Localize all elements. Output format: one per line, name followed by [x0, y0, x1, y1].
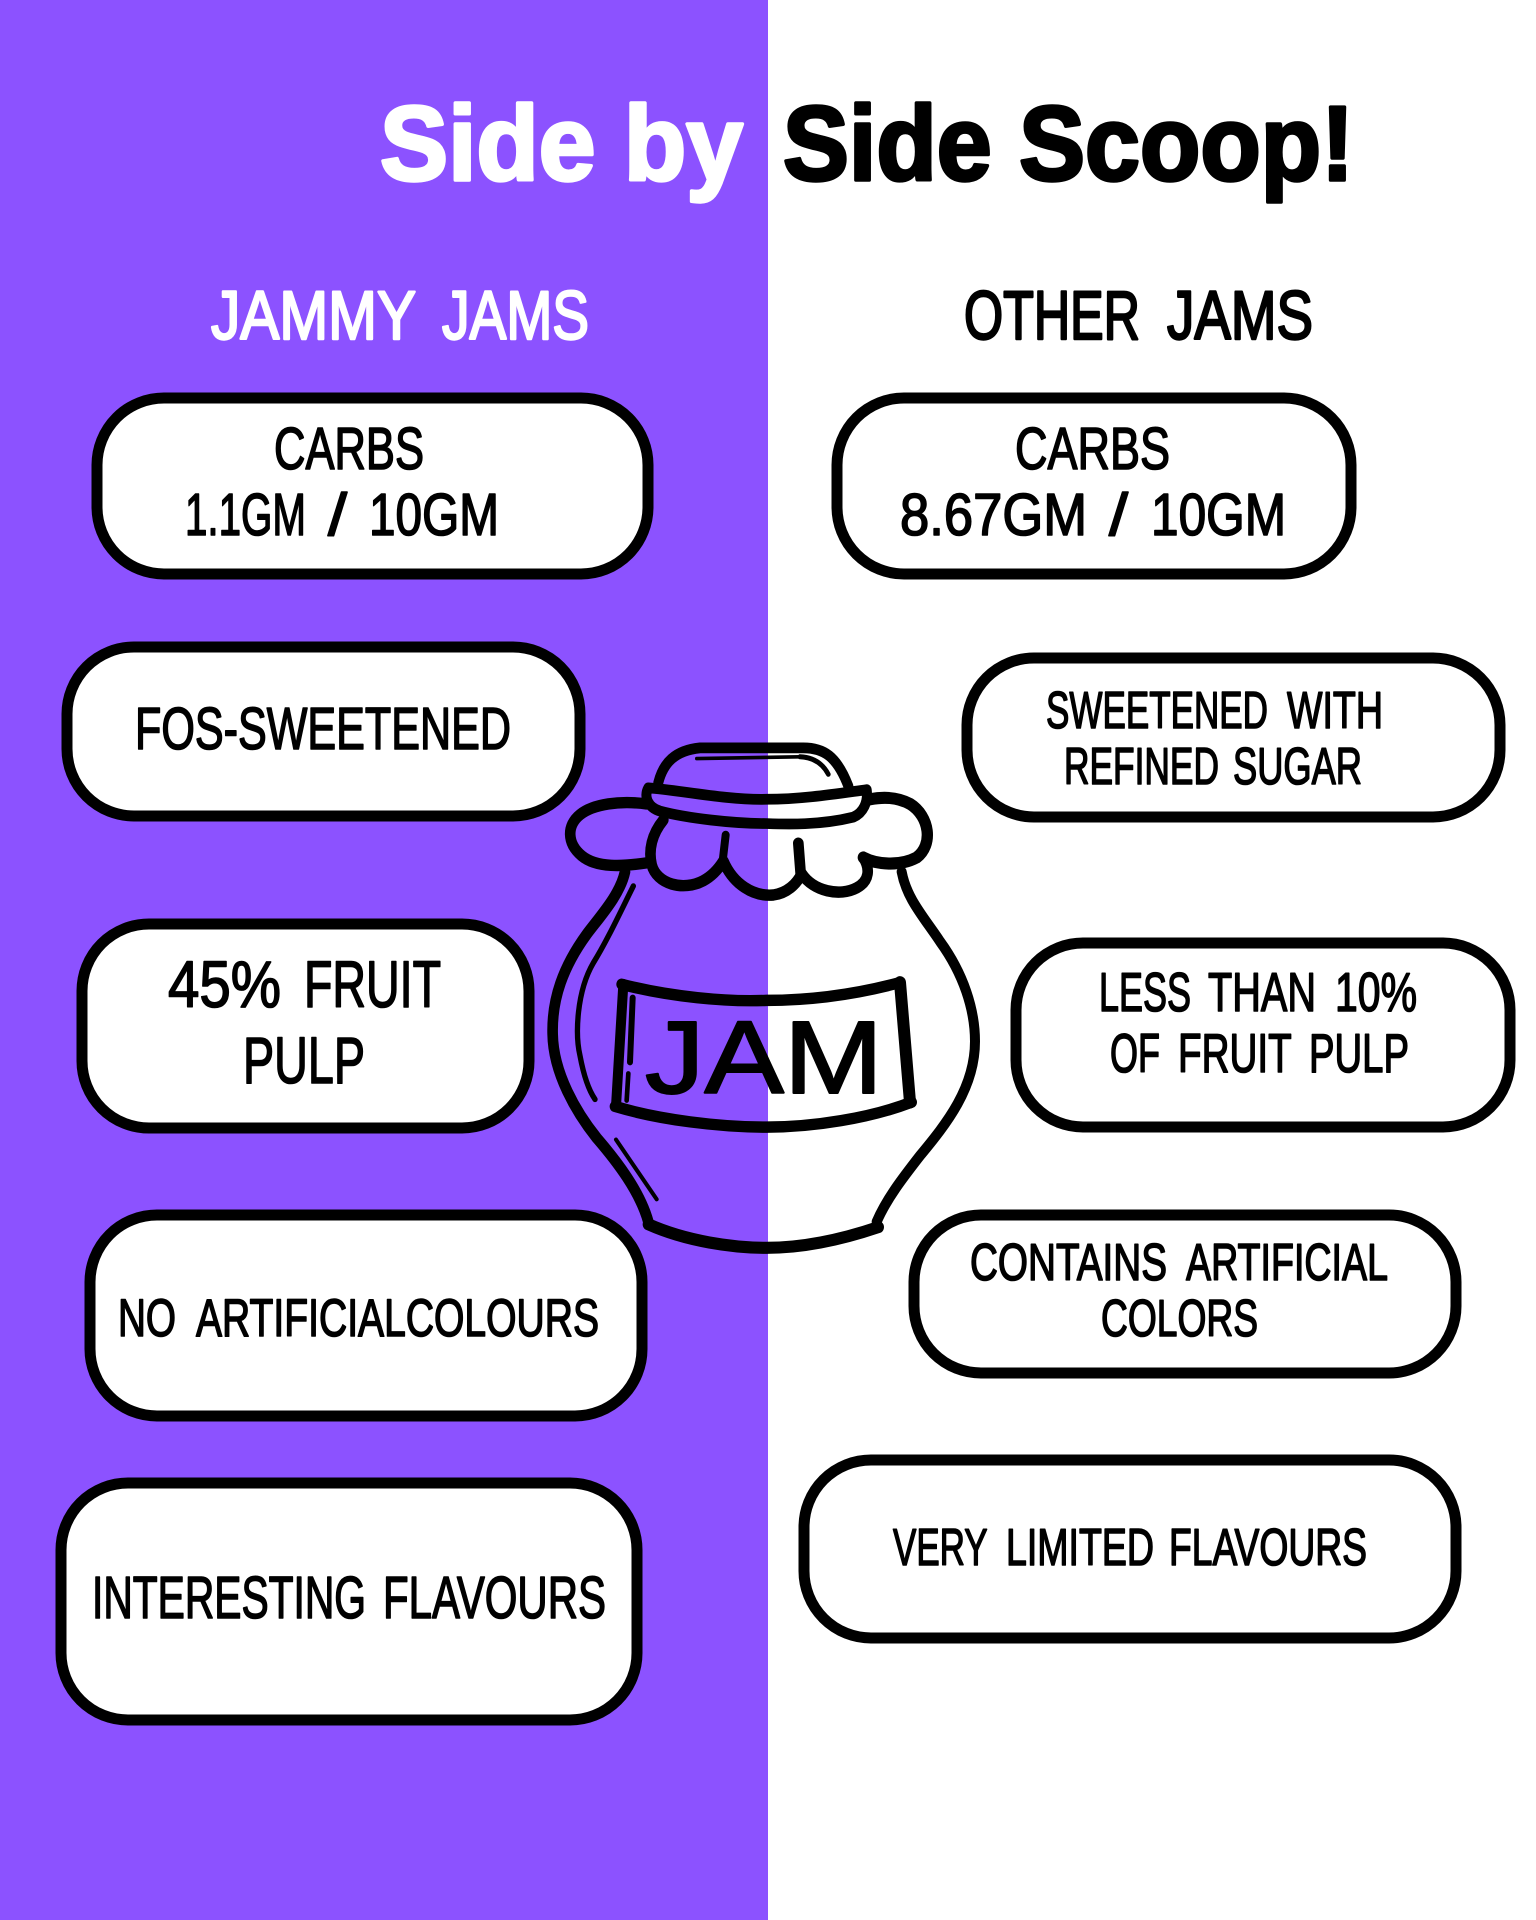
panel: interesting flavours: FLAVOURS	[383, 1565, 606, 1631]
panel: purple left half background	[0, 0, 768, 1920]
panel: very limited flavours: FLAVOURS	[1169, 1519, 1367, 1577]
title: black part: Side Scoop!	[783, 85, 1354, 203]
panel: interesting flavours	[61, 1483, 637, 1720]
panel: less than 10% fruit pulp: 10%	[1335, 961, 1417, 1023]
panel: 45% fruit pulp	[82, 924, 529, 1128]
panel: sweetened with refined sugar: SWEETENED	[1046, 682, 1268, 740]
panel: less than 10% fruit pulp: PULP	[1309, 1022, 1409, 1084]
panel: no artificial colours	[90, 1215, 642, 1416]
panel: sweetened with refined sugar: SUGAR	[1233, 738, 1362, 796]
panel: 45% fruit pulp: 45%	[168, 947, 281, 1021]
panel: Jammy Jams carbs: 1.1GM	[185, 482, 306, 548]
panel: 45% fruit pulp: PULP	[243, 1023, 365, 1097]
panel: no artificial colours: NO	[118, 1289, 176, 1348]
panel: less than 10% fruit pulp	[1016, 943, 1510, 1127]
panel: contains artificial colors	[914, 1215, 1456, 1373]
panel: Jammy Jams carbs: /	[328, 482, 348, 548]
panel: contains artificial colors: COLORS	[1101, 1290, 1258, 1348]
panel: Jammy Jams carbs	[97, 398, 648, 574]
panel: very limited flavours	[804, 1460, 1456, 1638]
panel: Jammy Jams carbs: CARBS	[274, 416, 424, 482]
panel: Other Jams carbs: /	[1109, 482, 1129, 548]
panel: very limited flavours: LIMITED	[1006, 1519, 1154, 1577]
panel: less than 10% fruit pulp: FRUIT	[1178, 1022, 1291, 1084]
panel: interesting flavours: INTERESTING	[92, 1565, 366, 1631]
panel: Other Jams carbs: 8.67GM	[900, 482, 1087, 548]
panel: contains artificial colors: CONTAINS	[970, 1234, 1167, 1292]
panel: sweetened with refined sugar: WITH	[1287, 682, 1383, 740]
heading: Jammy Jams: JAMMY	[211, 277, 415, 354]
panel: very limited flavours: VERY	[893, 1519, 987, 1577]
panel: no artificial colours: ARTIFICIALCOLOURS	[196, 1289, 599, 1348]
panel: sweetened with refined sugar	[967, 658, 1500, 817]
panel: Other Jams carbs	[837, 398, 1351, 574]
jar label text: JAM	[645, 1000, 883, 1115]
panel: Jammy Jams carbs: 10GM	[369, 482, 499, 548]
heading: Other Jams: OTHER	[964, 277, 1140, 354]
title	[380, 85, 1354, 203]
title: white part: Side by	[380, 85, 743, 203]
panel: Other Jams carbs: CARBS	[1015, 416, 1170, 482]
panel: less than 10% fruit pulp: OF	[1110, 1022, 1160, 1084]
panel: Other Jams carbs: 10GM	[1151, 482, 1286, 548]
panel: less than 10% fruit pulp: THAN	[1208, 961, 1316, 1023]
heading: Jammy Jams: JAMS	[442, 277, 589, 354]
panel: contains artificial colors: ARTIFICIAL	[1186, 1234, 1388, 1292]
panel: less than 10% fruit pulp: LESS	[1099, 961, 1191, 1023]
panel: FOS-sweetened	[67, 647, 580, 816]
heading: Other Jams: JAMS	[1167, 277, 1313, 354]
panel: sweetened with refined sugar: REFINED	[1064, 738, 1219, 796]
icon: jam jar	[553, 748, 975, 1248]
panel: FOS-sweetened: FOS-SWEETENED	[135, 696, 511, 762]
panel: 45% fruit pulp: FRUIT	[304, 947, 441, 1021]
